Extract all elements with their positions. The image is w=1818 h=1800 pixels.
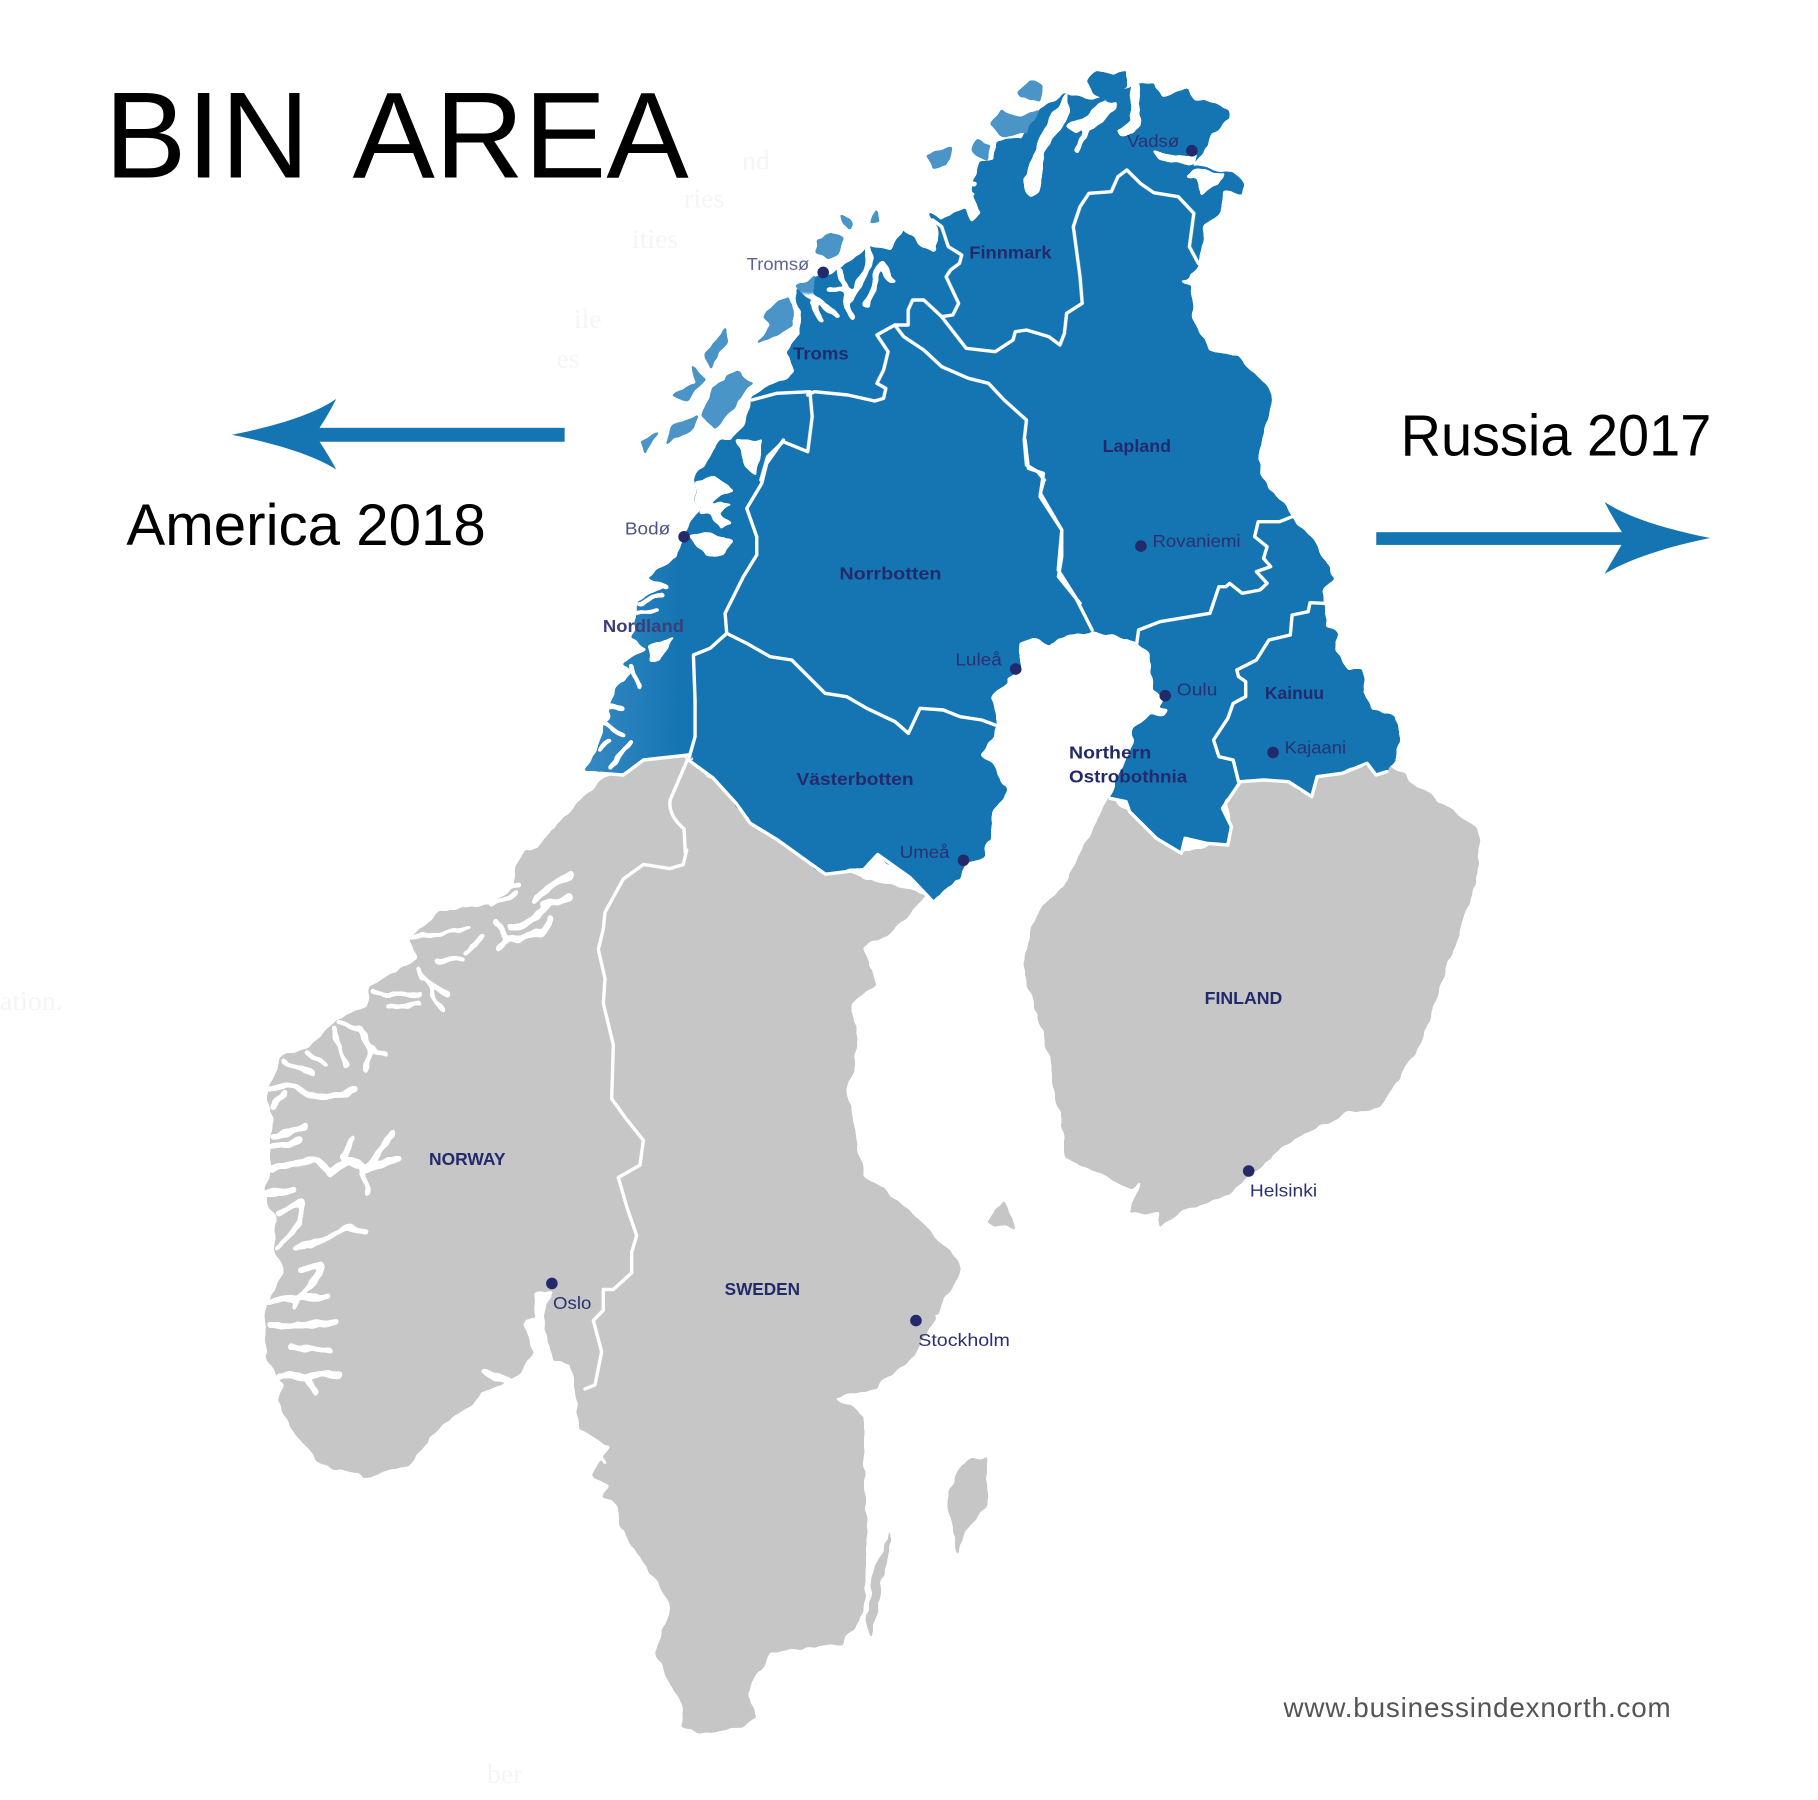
city labels: Umeå: [900, 842, 950, 862]
text: nd: [742, 145, 770, 176]
city labels: Stockholm: [918, 1330, 1010, 1350]
city labels: Oulu: [1177, 680, 1217, 700]
region labels: [429, 243, 1324, 1299]
Norway-Sweden border: [585, 759, 688, 1389]
region labels: Northern: [1069, 742, 1151, 762]
region labels: Finnmark: [969, 243, 1052, 263]
text: ber: [487, 1759, 523, 1790]
region labels: Lapland: [1103, 436, 1171, 456]
title: BIN: [104, 67, 310, 204]
coastal islands and fjords of northern Norway: [602, 70, 1225, 768]
website url: www.businessindexnorth.com: [1282, 1692, 1671, 1723]
city labels: Bodø: [625, 518, 671, 538]
region labels: Kainuu: [1265, 683, 1324, 703]
city labels: Oslo: [553, 1293, 591, 1313]
city markers: [546, 145, 1279, 1326]
text: ries: [684, 184, 724, 215]
map of the Nordic countries: [265, 70, 1479, 1734]
title: [104, 67, 689, 204]
city labels: Luleå: [955, 650, 1002, 670]
city labels: Vadsø: [1127, 131, 1180, 151]
city labels: [553, 131, 1346, 1350]
city labels: Kajaani: [1285, 738, 1346, 758]
text: es: [557, 344, 580, 375]
text: ities: [632, 224, 678, 255]
regional borders inside the BIN area: [600, 170, 1387, 902]
region labels: SWEDEN: [725, 1279, 800, 1299]
label: Russia 2017: Russia 2017: [1401, 405, 1711, 469]
BIN area land in blue: [585, 83, 1401, 902]
arrow: left to America: [232, 399, 565, 470]
region labels: Västerbotten: [797, 769, 914, 789]
text: ile: [574, 304, 602, 335]
city labels: Rovaniemi: [1152, 531, 1241, 551]
region labels: Norrbotten: [839, 564, 941, 584]
label: America 2018: America 2018: [126, 494, 486, 558]
region labels: Troms: [793, 343, 849, 363]
city labels: Helsinki: [1250, 1181, 1317, 1201]
title: AREA: [352, 67, 689, 204]
city labels: Tromsø: [747, 254, 810, 274]
region labels: Ostrobothnia: [1069, 767, 1188, 787]
text: ation.: [0, 986, 63, 1017]
region labels: FINLAND: [1205, 988, 1282, 1008]
land: Sweden, Norway, Finland and islands: [265, 754, 1479, 1734]
region labels: Nordland: [603, 616, 684, 636]
region labels: NORWAY: [429, 1149, 506, 1169]
fjords of southern Norway: [265, 875, 941, 1463]
arrow: right to Russia: [1376, 502, 1710, 574]
